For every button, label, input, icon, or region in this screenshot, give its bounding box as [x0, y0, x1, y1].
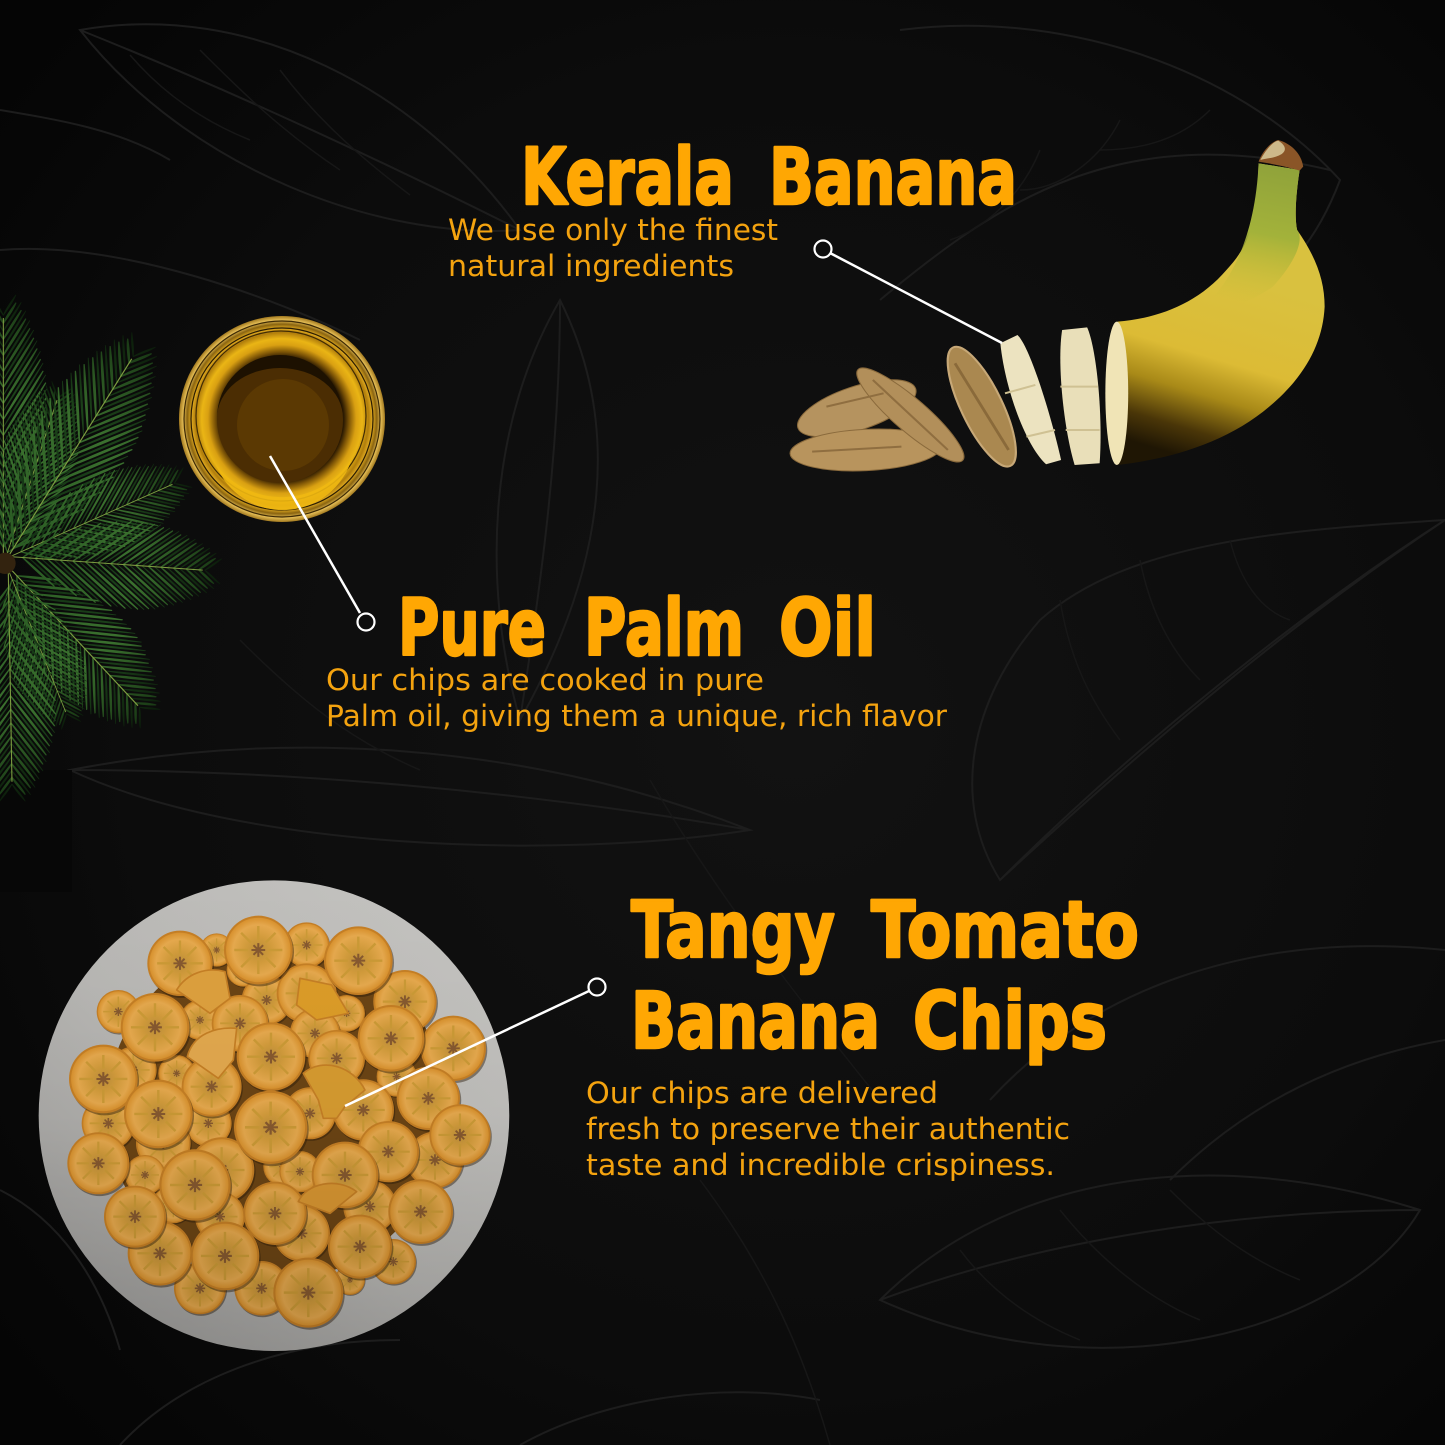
- text: Pure Palm Oil description: Our chips are cooked in pure: [326, 663, 764, 697]
- raw slice 2: [1060, 327, 1101, 465]
- banana crown: [1259, 140, 1303, 171]
- heading: Tangy Tomato Banana Chips: Chips: [913, 977, 1107, 1067]
- broken chips: [177, 970, 365, 1213]
- banana stem: [1191, 163, 1300, 317]
- frond centre right: [7, 513, 224, 615]
- bowl rings: [184, 321, 380, 517]
- frond upper right: [0, 314, 185, 587]
- banana body: [1105, 163, 1325, 465]
- heading: Pure Palm Oil: Palm: [584, 584, 744, 674]
- oil bowl: [179, 316, 385, 522]
- chips layer back: [82, 922, 487, 1224]
- text: Kerala Banana description: We use only the finest: [448, 213, 778, 247]
- heading: Tangy Tomato Banana Chips: Tomato: [871, 886, 1139, 976]
- raw slice 1: [1000, 335, 1061, 464]
- heading: Tangy Tomato Banana Chips: [631, 886, 1139, 1067]
- text: Kerala Banana description: natural ingredients: [448, 249, 734, 283]
- text: Pure Palm Oil description: [326, 663, 947, 733]
- text: Pure Palm Oil description: Palm oil, giving them a unique, rich flavor: [326, 699, 947, 733]
- heading: Pure Palm Oil: [398, 584, 876, 674]
- oil pool: [217, 357, 343, 483]
- heading: Kerala Banana: [521, 133, 1017, 223]
- banana cut face: [1105, 322, 1128, 465]
- text: Tangy Tomato description: fresh to preserve their authentic: [586, 1112, 1070, 1146]
- palm fronds: [0, 295, 224, 802]
- text: Tangy Tomato description: taste and incredible crispiness.: [586, 1148, 1055, 1182]
- bowl body: [179, 316, 385, 522]
- frond lower right: [0, 535, 185, 751]
- frond up: [0, 295, 47, 563]
- text: Tangy Tomato description: Our chips are delivered: [586, 1076, 938, 1110]
- chip shadow base: [107, 940, 447, 1280]
- chips layer front: [67, 916, 492, 1330]
- dried chip: [935, 339, 1029, 474]
- callout line: oil: [270, 456, 374, 630]
- chips layer middle: [125, 1079, 417, 1317]
- oil highlight: [216, 458, 352, 510]
- callout line: chips: [345, 978, 606, 1106]
- plate: [39, 880, 509, 1351]
- heading: Kerala Banana: Banana: [769, 133, 1017, 223]
- palm crown: [0, 553, 16, 574]
- frond back upper: [0, 373, 98, 575]
- lower shading over chips: [39, 880, 509, 1351]
- text: Kerala Banana description: [448, 213, 778, 283]
- text: Tangy Tomato description: [586, 1076, 1070, 1182]
- heading: Tangy Tomato Banana Chips: Tangy: [631, 886, 835, 976]
- dark patch under palm: [0, 770, 72, 892]
- frond down: [0, 573, 57, 802]
- frond right: [0, 443, 203, 591]
- dried chips cluster: [789, 358, 974, 474]
- banana: [789, 140, 1325, 474]
- heading: Pure Palm Oil: Oil: [779, 584, 876, 674]
- callout line: banana: [814, 240, 1002, 343]
- plate of banana chips: [39, 880, 509, 1351]
- frond back lower: [0, 556, 105, 739]
- heading: Tangy Tomato Banana Chips: Banana: [631, 977, 880, 1067]
- heading: Pure Palm Oil: Pure: [398, 584, 546, 674]
- heading: Kerala Banana: Kerala: [521, 133, 734, 223]
